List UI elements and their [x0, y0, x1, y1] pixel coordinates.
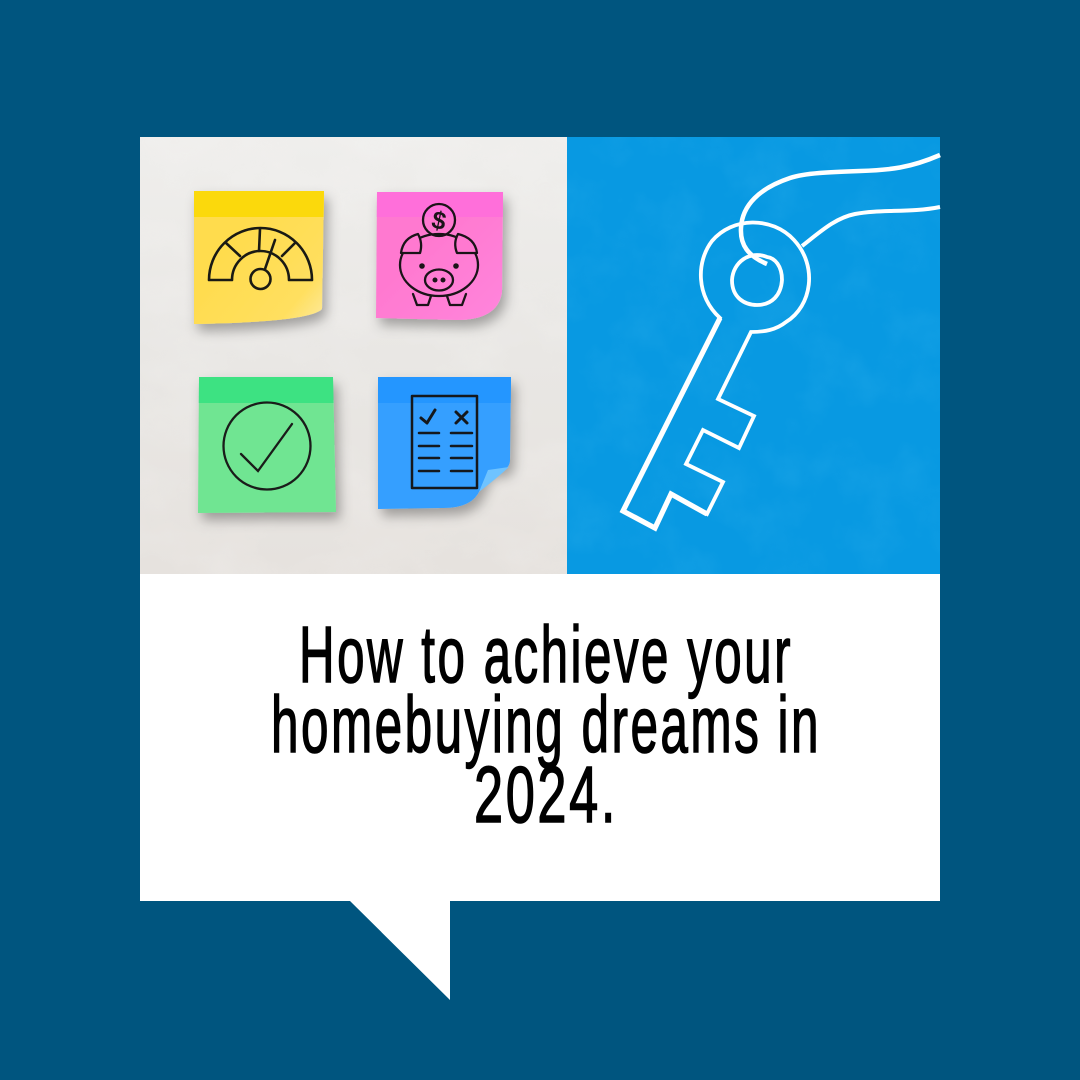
string upper: [741, 155, 940, 264]
key outline: [623, 222, 809, 528]
sticky note: piggy bank: [376, 192, 504, 320]
icon: check in circle: [224, 402, 310, 490]
icon: gauge: [209, 228, 312, 289]
blue key panel: [567, 137, 940, 574]
sticky note: checklist: [378, 377, 512, 509]
infographic canvas: [140, 137, 941, 1000]
note curled corner: [479, 467, 509, 492]
string lower: [802, 207, 940, 246]
title: [271, 610, 821, 839]
speech bubble panel: [140, 137, 940, 1000]
title line 1: How to achieve your: [299, 610, 793, 699]
key ring hole: [732, 255, 782, 305]
title line 3: 2024.: [474, 750, 618, 839]
paper photo panel: [140, 137, 567, 574]
icon: key on string: [623, 155, 940, 528]
key left edge emphasis: [623, 318, 720, 528]
icon: pros and cons document: [412, 396, 477, 488]
icon: piggy bank with coin: $: [429, 206, 449, 236]
sticky note: credit score gauge: [194, 191, 325, 324]
sticky note: checkmark: [198, 377, 337, 513]
